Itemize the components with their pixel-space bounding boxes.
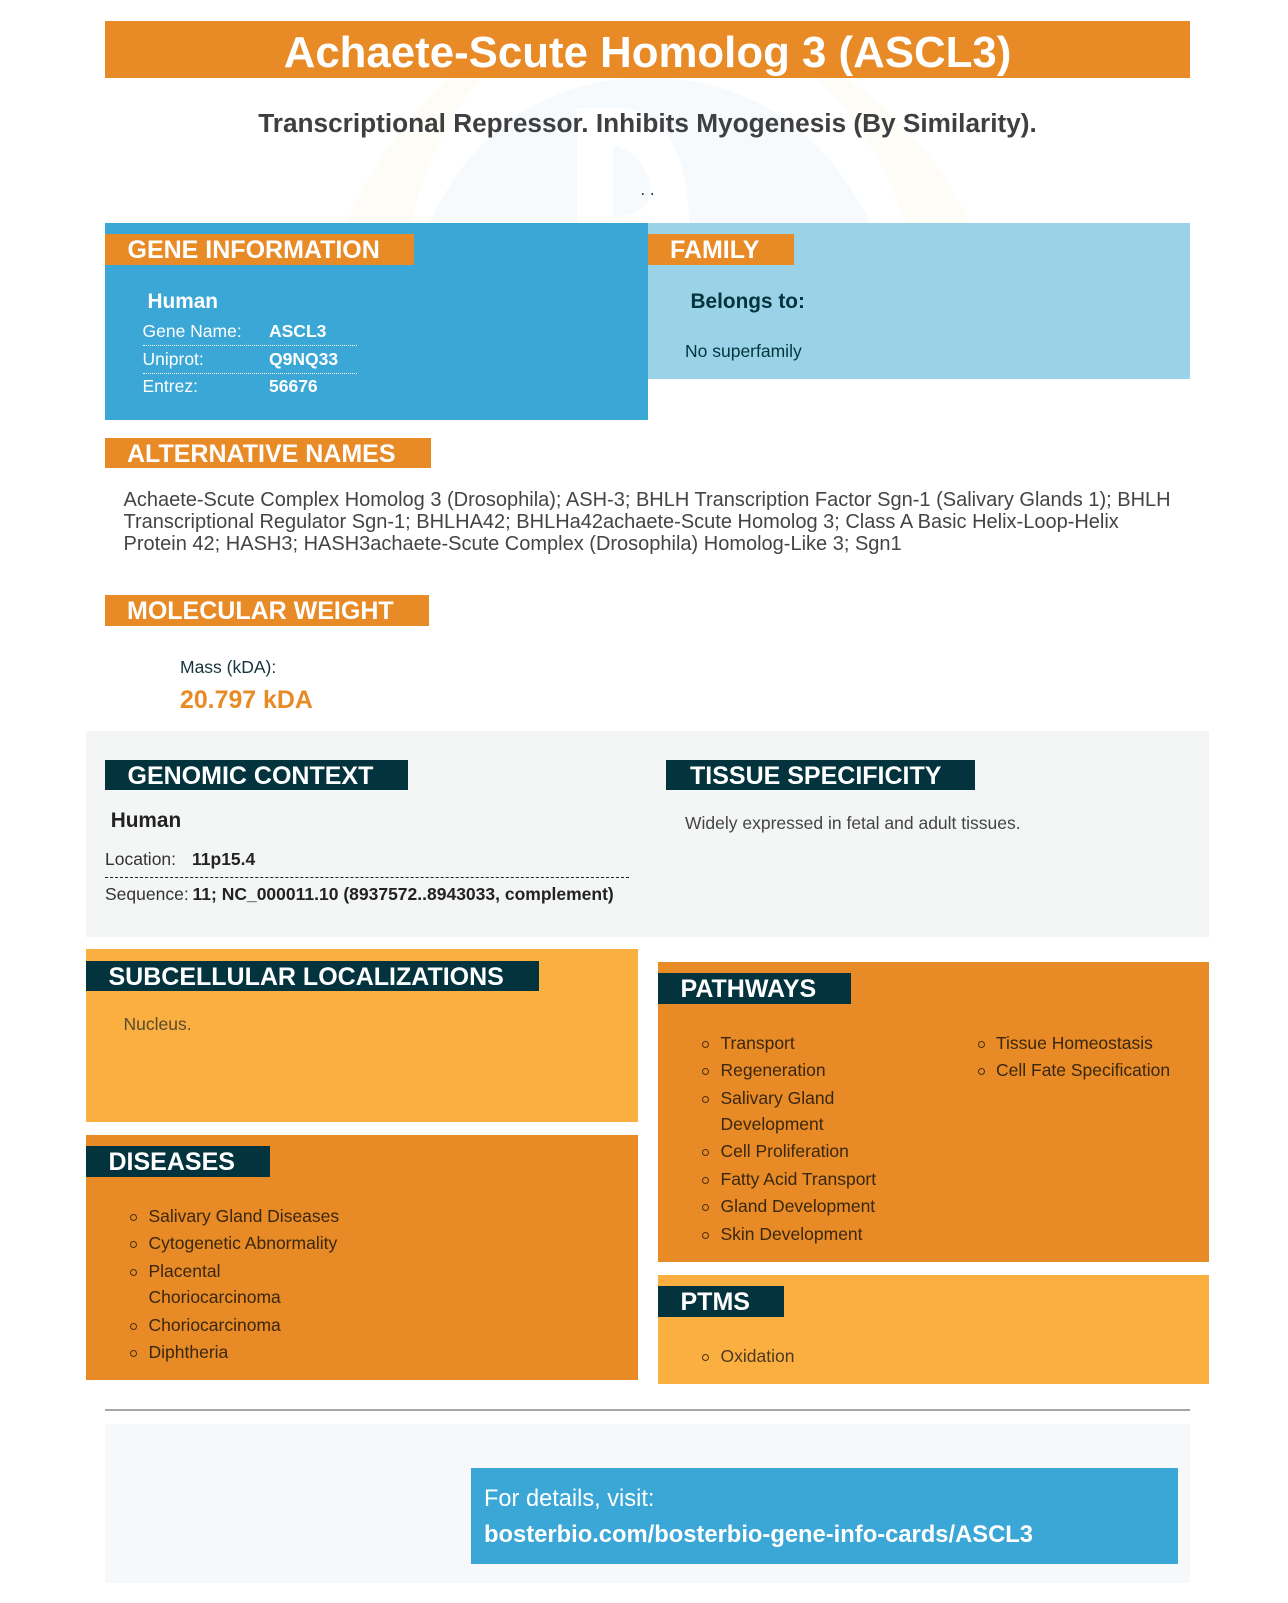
pathway list column 1: Salivary Gland	[720, 1088, 834, 1108]
pathway list column 1: Transport	[720, 1033, 795, 1053]
row: uniprot	[142, 349, 338, 369]
heading: tissue specificity: TISSUE SPECIFICITY	[690, 762, 941, 790]
heading: alternative names: ALTERNATIVE NAMES	[127, 440, 396, 468]
disease list: Diphtheria	[148, 1342, 228, 1362]
disease list: Choriocarcinoma	[148, 1287, 281, 1307]
pathway list column 2	[978, 1033, 1170, 1080]
panel: subcellular localizations	[86, 949, 638, 1122]
dots: . .	[640, 180, 655, 199]
heading: ptms: PTMS	[680, 1288, 750, 1316]
heading: diseases: DISEASES	[108, 1148, 235, 1176]
family value: No superfamily	[685, 341, 802, 361]
row: uniprot: Q9NQ33	[269, 349, 338, 369]
pathway list column 2: Tissue Homeostasis	[996, 1033, 1153, 1053]
row: entrez: 56676	[269, 376, 318, 396]
belongs to label: Belongs to:	[690, 290, 805, 313]
tissue specificity text: Widely expressed in fetal and adult tissues.	[685, 813, 1021, 833]
organism label: Human	[148, 290, 218, 313]
location row	[105, 849, 256, 869]
heading: subcellular localizations: SUBCELLULAR LOCALIZATIONS	[108, 963, 504, 991]
alternative names text	[124, 489, 1171, 555]
panel: footer	[105, 1424, 1190, 1583]
location row: 11p15.4	[192, 849, 255, 869]
pathway list column 1: Fatty Acid Transport	[720, 1169, 876, 1189]
mass value: 20.797 kDA	[180, 686, 313, 714]
title: Achaete-Scute Homolog 3 (ASCL3)	[284, 28, 1011, 77]
panel: genomic context and tissue specificity	[86, 731, 1209, 937]
row: gene name: ASCL3	[269, 321, 326, 341]
row: uniprot: Uniprot:	[142, 349, 204, 369]
sequence row: 11; NC_000011.10 (8937572..8943033, complement)	[192, 884, 614, 904]
pathway list column 1: Cell Proliferation	[720, 1141, 849, 1161]
heading: pathways: PATHWAYS	[680, 975, 816, 1003]
panel: diseases	[86, 1135, 638, 1380]
alternative names text: Transcriptional Regulator Sgn-1; BHLHA42; BHLHa42achaete-Scute Homolog 3; Class A Basic Helix-Loop-Helix	[124, 511, 1119, 533]
disease list: Placental	[148, 1261, 220, 1281]
heading: molecular weight: MOLECULAR WEIGHT	[127, 597, 394, 625]
row: entrez	[142, 376, 318, 396]
ptm list item: Oxidation	[720, 1346, 794, 1366]
title	[105, 21, 1190, 78]
panel: pathways	[658, 962, 1209, 1262]
heading: gene information: GENE INFORMATION	[128, 236, 380, 264]
subcellular text: Nucleus.	[124, 1014, 192, 1034]
panel: family	[648, 223, 1190, 379]
pathway list column 1: Development	[720, 1114, 824, 1134]
location row: Location:	[105, 849, 176, 869]
disease list: Choriocarcinoma	[148, 1315, 281, 1335]
pathway list column 1: Regeneration	[720, 1060, 826, 1080]
heading: family: FAMILY	[670, 236, 759, 264]
sequence row: Sequence:	[105, 884, 189, 904]
heading: ptms	[658, 1286, 784, 1317]
disease list	[130, 1206, 339, 1362]
panel: ptms	[658, 1275, 1209, 1384]
pathway list column 1: Skin Development	[720, 1224, 863, 1244]
row: gene name	[142, 321, 326, 341]
callout url: bosterbio.com/bosterbio-gene-info-cards/ASCL3	[484, 1521, 1033, 1548]
callout: details link	[471, 1468, 1178, 1564]
watermark: faint logo behind subtitle	[430, 78, 870, 223]
panel: gene information	[105, 223, 648, 420]
row: entrez: Entrez:	[142, 376, 198, 396]
organism label: Human	[111, 809, 181, 832]
alternative names text: Achaete-Scute Complex Homolog 3 (Drosophila); ASH-3; BHLH Transcription Factor Sgn-1 (Salivary Glands 1); BHLH	[124, 489, 1171, 511]
pathway list column 2: Cell Fate Specification	[996, 1060, 1170, 1080]
pathway list column 1	[702, 1033, 876, 1244]
mass label: Mass (kDA):	[180, 657, 276, 677]
heading: pathways	[658, 973, 851, 1004]
subtitle: Transcriptional Repressor. Inhibits Myogenesis (By Similarity).	[258, 108, 1037, 138]
pathway list column 1: Gland Development	[720, 1196, 875, 1216]
heading: family	[648, 234, 794, 265]
disease list: Cytogenetic Abnormality	[148, 1233, 337, 1253]
alternative names text: Protein 42; HASH3; HASH3achaete-Scute Complex (Drosophila) Homolog-Like 3; Sgn1	[124, 533, 902, 555]
heading: genomic context: GENOMIC CONTEXT	[128, 762, 373, 790]
callout label: For details, visit:	[484, 1486, 654, 1512]
row: gene name: Gene Name:	[142, 321, 242, 341]
heading: diseases	[86, 1146, 270, 1177]
disease list: Salivary Gland Diseases	[148, 1206, 339, 1226]
